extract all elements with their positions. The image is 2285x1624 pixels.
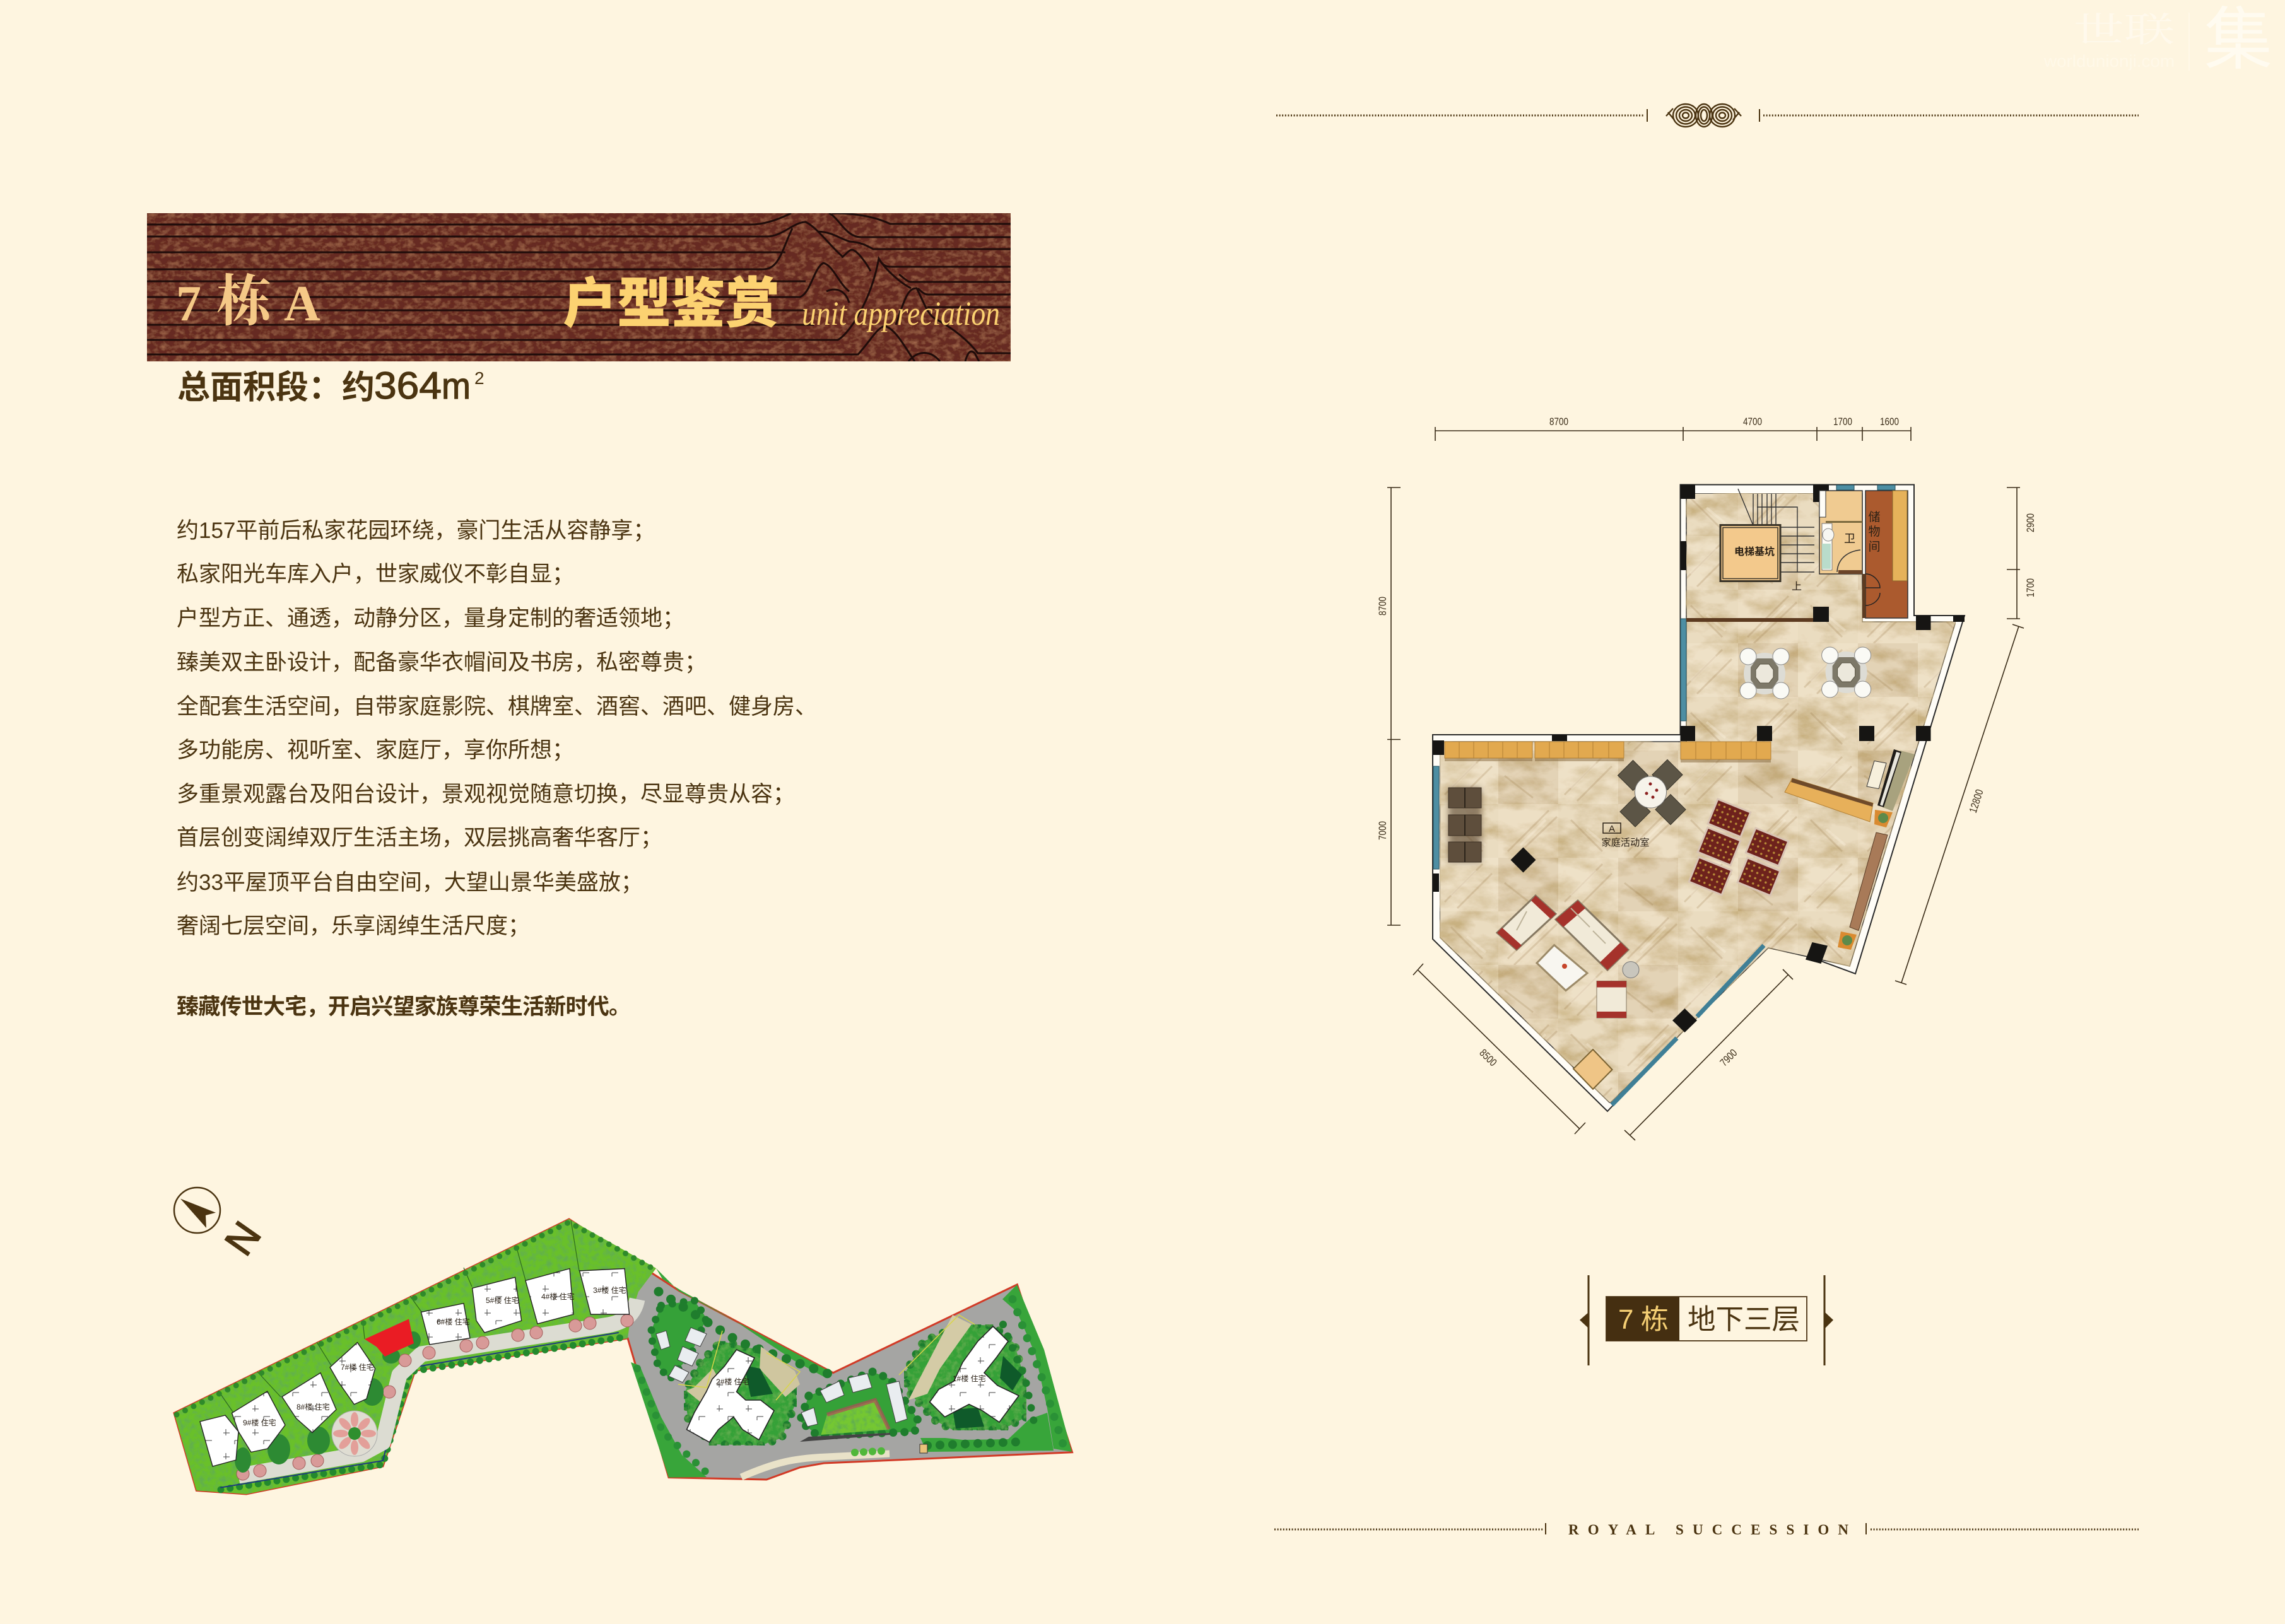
structural columns (1433, 484, 1965, 1032)
top ornament divider (1276, 104, 2139, 127)
floor tile pattern (1440, 493, 1956, 1103)
angled cabinet (1785, 778, 1873, 822)
dimension labels: 1600 (1880, 416, 1899, 428)
watermark: 世联集 (2043, 1, 2272, 78)
room label: 家庭活动室: 家庭活动室 (1602, 838, 1649, 848)
subheading unit appreciation: unit appreciation (802, 295, 1000, 332)
west wing hedge and paved path (177, 1222, 654, 1490)
building labels (243, 1285, 626, 1427)
piano (1867, 749, 1915, 811)
site plan (174, 1219, 1072, 1494)
tower labels: 1#楼 住宅 (953, 1374, 986, 1383)
features text block: 臻美双主卧设计，配备豪华衣帽间及书房，私密尊贵； (177, 650, 707, 675)
building labels: 9#楼 住宅 (243, 1418, 276, 1427)
dimension labels: 7000 (1377, 821, 1389, 840)
exterior walls (1433, 484, 1965, 1111)
banner contour lines and mountains (147, 213, 1011, 361)
west wing lawn (174, 1219, 656, 1494)
total area line: 约 (342, 370, 375, 406)
features text block: 约33平屋顶平台自由空间，大望山景华美盛放； (177, 870, 643, 895)
features text block: 多功能房、视听室、家庭厅，享你所想； (177, 738, 574, 762)
elevator pit: 电梯基坑 (1734, 546, 1775, 558)
tower labels: 2#楼 住宅 (716, 1377, 749, 1386)
theatre seats (1689, 799, 1789, 896)
building title 7栋A: 7 (176, 276, 201, 332)
west villas (200, 1269, 630, 1466)
features text block: 私家阳光车库入户，世家威仪不彰自显； (177, 562, 574, 587)
plot divider lines (218, 1220, 579, 1413)
lounge chairs (1448, 788, 1481, 862)
floor badge: 7栋 地下三层: 栋 (1641, 1304, 1669, 1335)
building labels: 4#楼 住宅 (541, 1292, 575, 1301)
dining tables (1740, 647, 1871, 699)
room: storage: 储 (1868, 510, 1881, 524)
room: storage: 物 (1868, 525, 1881, 539)
title banner (147, 213, 1011, 361)
dimension labels: 4700 (1743, 416, 1762, 428)
features text block: 约157平前后私家花园环绕，豪门生活从容静享； (177, 518, 655, 543)
watermark: 世联集: worldunionji.com (2043, 52, 2175, 71)
flower plaza (332, 1411, 377, 1456)
tree rows (637, 1292, 1063, 1477)
building labels: 8#楼 住宅 (297, 1402, 330, 1411)
watermark: 世联集: 世联 (2074, 11, 2175, 49)
dimension lines (1387, 427, 2024, 1140)
dimension labels: 2900 (2024, 513, 2036, 532)
east strips and tree rows (631, 1268, 1072, 1478)
parking (656, 1328, 907, 1427)
features text block: 首层创变阔绰双厅生活主场，双层挑高奢华客厅； (177, 826, 662, 850)
total area line (177, 365, 485, 407)
building labels: 5#楼 住宅 (486, 1295, 519, 1305)
plazas and access road detail (678, 1315, 975, 1453)
room: bathroom (1819, 491, 1862, 574)
sofas and coffee table (1497, 896, 1639, 1089)
east towers (686, 1326, 1019, 1442)
building title 7栋A (176, 257, 320, 337)
dimension labels: 1700 (1833, 416, 1852, 428)
total area line: 364 (374, 365, 442, 407)
garden beds (235, 1331, 421, 1473)
dimension labels: 1700 (2024, 578, 2036, 597)
features text block: 户型方正、通透，动静分区，量身定制的奢适领地； (177, 606, 684, 631)
total area line: 总面积段： (177, 370, 341, 406)
dimension labels: 8700 (1377, 597, 1389, 616)
total area line: m (442, 366, 471, 407)
threshold (1686, 618, 1813, 622)
room: storage: 间 (1868, 540, 1881, 554)
features text block: 奢阔七层空间，乐享阔绰生活尺度； (177, 914, 530, 938)
heading 户型鉴赏: 户型鉴赏 (563, 259, 780, 338)
stairs (1738, 489, 1814, 572)
floor badge: 7栋 地下三层: 地下三层 (1688, 1304, 1800, 1335)
room: storage (1862, 491, 1908, 618)
floor badge: 7栋 地下三层: 7 (1618, 1304, 1633, 1335)
dimension labels (1377, 416, 2036, 1068)
mahjong table (1618, 759, 1686, 827)
features text block: 臻藏传世大宅，开启兴望家族尊荣生活新时代。 (177, 995, 631, 1019)
icon: north compass: N (216, 1213, 270, 1263)
marble floor (1440, 493, 1956, 1103)
features text block: 多重景观露台及阳台设计，景观视觉随意切换，尽显尊贵从容； (177, 782, 795, 807)
footer: ROYAL SUCCESSION: ROYAL SUCCESSION (1568, 1522, 1848, 1538)
room label: 家庭活动室: A (1609, 824, 1615, 834)
room: bathroom: 卫 (1844, 532, 1855, 545)
floor plan: 地下三层 (1377, 416, 2036, 1140)
planters (1838, 810, 1893, 950)
building title 7栋A: 栋 (216, 257, 275, 337)
site base (174, 1219, 1072, 1494)
dimension labels: 7900 (1718, 1047, 1739, 1068)
dimension labels: 8500 (1477, 1047, 1499, 1068)
dimension labels: 8700 (1549, 416, 1568, 428)
dimension labels: 12800 (1967, 788, 1986, 814)
highlighted unit in red (365, 1319, 414, 1357)
building labels: 3#楼 住宅 (593, 1285, 626, 1295)
building labels: 6#楼 住宅 (437, 1317, 470, 1326)
building labels: 7#楼 住宅 (341, 1362, 374, 1372)
features text block (177, 518, 817, 1019)
windows (1433, 485, 1895, 869)
sideboard (1850, 832, 1888, 931)
elevator pit (1720, 525, 1780, 581)
dark garden shade (744, 1356, 1022, 1428)
tower labels (716, 1374, 986, 1386)
building title 7栋A: A (284, 276, 320, 332)
total area line: 2 (474, 368, 485, 388)
room label: 家庭活动室 (1602, 823, 1649, 848)
central and east gardens (684, 1341, 797, 1446)
features text block: 全配套生活空间，自带家庭影院、棋牌室、酒窖、酒吧、健身房、 (177, 694, 817, 719)
entry planters (237, 1314, 633, 1480)
icon: north compass (174, 1188, 270, 1263)
floor badge: 7栋 地下三层 (1580, 1275, 1833, 1365)
watermark: 世联集: 集 (2204, 1, 2272, 78)
stair label: 上 (1792, 581, 1802, 592)
wall cabinets (1445, 742, 1771, 762)
